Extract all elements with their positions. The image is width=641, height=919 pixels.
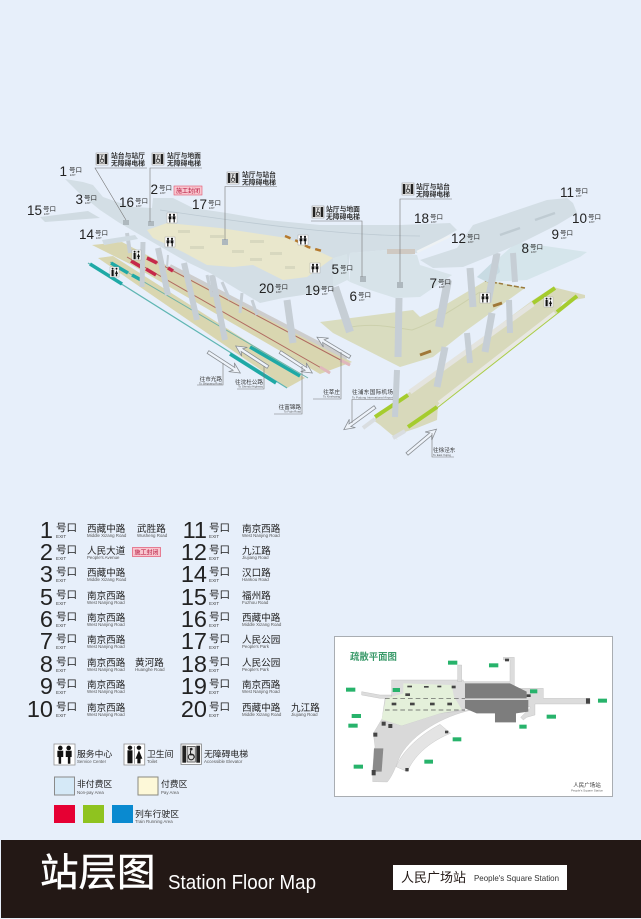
exit list row 19: 南京西路 bbox=[242, 679, 281, 691]
panel: lower concourse bbox=[320, 280, 525, 367]
exit list row 18: EXIT bbox=[209, 668, 219, 673]
exit list row 6: 号口 bbox=[56, 611, 77, 623]
exit list row 11: 号口 bbox=[209, 522, 230, 534]
callout: hall to platform elevator east: 站厅与站台 bbox=[416, 182, 450, 191]
exit list row 3: 3 bbox=[40, 561, 53, 587]
exit labels on map: 号口 bbox=[208, 199, 221, 207]
exit list row 14: 号口 bbox=[209, 566, 230, 578]
exit list row 9: 9 bbox=[40, 673, 53, 699]
exit labels on map: 号口 bbox=[84, 194, 97, 202]
exit list row 7: West Nanjing Road bbox=[87, 644, 125, 649]
exit list row 17 bbox=[181, 628, 280, 654]
exit labels on map: 16 bbox=[119, 195, 134, 210]
exit labels on map: 号口 bbox=[69, 166, 82, 174]
exit list row 2: 号口 bbox=[56, 544, 77, 556]
exit list row 8: EXIT bbox=[56, 668, 66, 673]
direction arrow: to Shendu Highway: To Shendu Highway bbox=[238, 384, 264, 388]
exit list row 3: 号口 bbox=[56, 566, 77, 578]
exit labels on map: 号口 bbox=[467, 233, 480, 241]
exit labels on map: EXIT bbox=[96, 236, 102, 240]
callout: hall to platform elevator west: 无障碍电梯 bbox=[242, 178, 276, 186]
exit labels on map: EXIT bbox=[359, 298, 365, 302]
exit labels on map: 9 bbox=[551, 227, 559, 242]
exit list row 15: 号口 bbox=[209, 589, 230, 601]
exit list row 20: Jiujiang Road bbox=[291, 712, 318, 717]
exit labels on map: EXIT bbox=[531, 250, 537, 254]
green train area bbox=[375, 288, 577, 427]
exit list row 2: 2 bbox=[40, 539, 53, 565]
legend: accessible elevator bbox=[181, 744, 248, 764]
callout: platform to hall elevator bbox=[95, 151, 147, 220]
exit list row 1: Wusheng Road bbox=[137, 533, 168, 538]
support columns bbox=[127, 233, 515, 417]
exit labels on map: 号口 bbox=[438, 278, 451, 286]
exit labels on map: 18 bbox=[414, 211, 429, 226]
exit labels on map: EXIT bbox=[341, 271, 347, 275]
legend: toilet: 卫生间 bbox=[147, 748, 174, 759]
direction arrow: to Shiguang Road: To Shiguang Road bbox=[199, 381, 222, 385]
legend: toilet: Toilet bbox=[147, 759, 158, 764]
direction arrow: to Xinzhuang: 往莘庄 bbox=[323, 388, 340, 396]
exit labels on map: 号口 bbox=[95, 229, 108, 237]
exit list row 6: EXIT bbox=[56, 623, 66, 628]
exit list row 19: 号口 bbox=[209, 678, 230, 690]
legend: accessible elevator: Accessible Elevator bbox=[204, 759, 243, 764]
exit list row 17: 号口 bbox=[209, 633, 230, 645]
exit list row 15 bbox=[181, 584, 271, 610]
exit labels on map: 3 bbox=[75, 192, 83, 207]
exit labels on map: 号口 bbox=[321, 285, 334, 293]
exit list row 1: 1 bbox=[40, 517, 53, 543]
station name in plan: 人民广场站 bbox=[573, 781, 601, 789]
exit list row 5 bbox=[40, 584, 126, 610]
exit list row 17: EXIT bbox=[209, 645, 219, 650]
exit list row 1: 武胜路 bbox=[137, 523, 166, 535]
exit list row 10: 号口 bbox=[56, 701, 77, 713]
exit list row 14: EXIT bbox=[209, 578, 219, 583]
direction arrow: to Fujin Road: 往富锦路 bbox=[279, 403, 301, 411]
legend: train running area: 列车行驶区 bbox=[135, 808, 179, 819]
exit list row 3 bbox=[40, 561, 127, 587]
exit list row 20: 号口 bbox=[209, 701, 230, 713]
exit list row 17: 人民公园 bbox=[242, 635, 280, 646]
exit list row 17: People's Park bbox=[242, 644, 270, 649]
callout: hall to ground elevator bbox=[150, 151, 202, 222]
exit list row 8: 黄河路 bbox=[135, 657, 164, 669]
exit labels on map: 17 bbox=[192, 197, 207, 212]
exit labels on map: EXIT bbox=[209, 206, 215, 210]
legend: toilet bbox=[124, 744, 174, 765]
footer band bbox=[1, 840, 641, 918]
station name plate bbox=[393, 865, 567, 890]
exit list row 2: 施工封闭 bbox=[134, 548, 159, 556]
direction arrow: to Pudong International Airport bbox=[341, 388, 393, 434]
exit labels on map: EXIT bbox=[576, 194, 582, 198]
legend bbox=[54, 744, 248, 824]
exit labels on map: 号口 bbox=[530, 243, 543, 251]
exit list row 16: 西藏中路 bbox=[242, 612, 281, 624]
direction arrow: to Xinzhuang: To Xinzhuang bbox=[323, 394, 340, 398]
exit list row 8: 号口 bbox=[56, 656, 77, 668]
direction arrow: to Pudong International Airport: To Pudong International Airport bbox=[352, 395, 393, 399]
callout: hall to platform elevator east bbox=[400, 182, 452, 282]
exit labels on map: 14 bbox=[79, 227, 94, 242]
exit list row 11: 南京西路 bbox=[242, 523, 281, 535]
panel: exit 8 upper level bbox=[477, 242, 587, 282]
direction arrow: to Shendu Highway: 往沈杜公路 bbox=[235, 378, 263, 386]
panel: pay area hall bbox=[147, 223, 333, 280]
exit list row 18: People's Park bbox=[242, 667, 270, 672]
exit list row 7: 号口 bbox=[56, 633, 77, 645]
exit list row 16: 号口 bbox=[209, 611, 230, 623]
exit list row 7: 7 bbox=[40, 628, 53, 654]
evacuation floor plan drawing bbox=[346, 657, 607, 782]
exit labels on map: EXIT bbox=[589, 220, 595, 224]
exit labels on map: 7 bbox=[429, 276, 437, 291]
exit list row 19: West Nanjing Road bbox=[242, 689, 280, 694]
exit list row 12 bbox=[181, 539, 271, 565]
legend: service center: 服务中心 bbox=[77, 748, 112, 759]
exit list row 8: 南京西路 bbox=[87, 657, 126, 669]
exit labels on map: 15 bbox=[27, 203, 42, 218]
exit list bbox=[27, 517, 320, 722]
station name plate: People's Square Station bbox=[474, 873, 559, 883]
exit list row 2: People's Avenue bbox=[87, 555, 120, 560]
exit list row 12: Jiujiang Road bbox=[242, 555, 269, 560]
exit list row 10: West Nanjing Road bbox=[87, 712, 125, 717]
3D station cutaway map bbox=[27, 151, 601, 458]
exit list row 18 bbox=[181, 651, 280, 677]
direction arrow: to Shiguang Road: 往市光路 bbox=[200, 375, 222, 383]
exit labels on map: 号口 bbox=[560, 229, 573, 237]
exit labels on map: 8 bbox=[521, 241, 529, 256]
exit list row 16: 16 bbox=[181, 606, 207, 632]
footer title: 站层图 bbox=[40, 852, 156, 895]
exit list row 15: 福州路 bbox=[242, 590, 271, 602]
exit list row 19 bbox=[181, 673, 281, 699]
exit list row 14 bbox=[181, 561, 271, 587]
exit labels on map: 1 bbox=[59, 164, 67, 179]
icons: toilets on map bbox=[110, 250, 553, 307]
exit list row 10 bbox=[27, 696, 126, 722]
exit list row 8: Huanghe Road bbox=[135, 667, 165, 672]
exit labels on map: 2 bbox=[150, 182, 158, 197]
elevator landing markers bbox=[123, 220, 403, 288]
exit list row 2 bbox=[40, 539, 160, 565]
exit list row 1: EXIT bbox=[56, 534, 66, 539]
panel: line 2 platform level bbox=[363, 287, 585, 440]
exit list row 3: EXIT bbox=[56, 578, 66, 583]
legend: train running area bbox=[54, 805, 179, 824]
exit list row 11: 11 bbox=[183, 517, 207, 543]
exit list row 20: 20 bbox=[181, 696, 207, 722]
exit labels on map: EXIT bbox=[136, 204, 142, 208]
exit list row 15: Fuzhou Road bbox=[242, 600, 269, 605]
teal train area bbox=[90, 263, 300, 383]
exit labels on map: EXIT bbox=[468, 240, 474, 244]
exit labels on map: EXIT bbox=[160, 191, 166, 195]
exit list row 2: EXIT bbox=[56, 556, 66, 561]
exit list row 3: Middle Xizang Road bbox=[87, 577, 127, 582]
direction arrow: to Shendu Highway bbox=[233, 342, 271, 389]
exit list row 18: 18 bbox=[181, 651, 207, 677]
exit list row 8: 8 bbox=[40, 651, 53, 677]
legend: pay area: 付费区 bbox=[161, 778, 188, 789]
exit list row 16: EXIT bbox=[209, 623, 219, 628]
icons: service centers on map bbox=[165, 213, 490, 303]
exit labels on map: 10 bbox=[572, 211, 587, 226]
direction arrow: to Xinzhuang bbox=[313, 333, 353, 399]
panel: line 1 and 8 platform level bbox=[88, 242, 352, 388]
direction arrow: to Fujin Road bbox=[274, 348, 315, 414]
legend: service center bbox=[54, 744, 112, 765]
exit list row 8 bbox=[40, 651, 165, 677]
exit list row 5: EXIT bbox=[56, 601, 66, 606]
callout: platform to hall elevator: 站台与站厅 bbox=[111, 151, 145, 160]
legend: pay area bbox=[138, 777, 188, 795]
callout: hall to ground elevator east: 无障碍电梯 bbox=[326, 212, 360, 221]
panel: evacuation plan: People's Square Station bbox=[571, 788, 603, 792]
panel: main station hall centre bbox=[333, 250, 452, 298]
exit list row 9: 南京西路 bbox=[87, 679, 126, 691]
exit list row 2: 人民大道 bbox=[87, 545, 126, 557]
exit list row 19: EXIT bbox=[209, 690, 219, 695]
exit list row 14: 汉口路 bbox=[242, 567, 271, 579]
exit list row 5: 5 bbox=[40, 584, 53, 610]
exit labels on map: EXIT bbox=[85, 201, 91, 205]
exit list row 14: 14 bbox=[181, 561, 207, 587]
exit list row 5: 南京西路 bbox=[87, 590, 126, 602]
exit list row 3: 西藏中路 bbox=[87, 567, 126, 579]
exit labels on map: 号口 bbox=[159, 184, 172, 192]
exit list row 18: 人民公园 bbox=[242, 658, 280, 669]
exit list row 1 bbox=[40, 517, 168, 543]
legend: service center: Service Center bbox=[77, 759, 107, 764]
exit labels on map: 6 bbox=[349, 289, 357, 304]
exit list row 9: EXIT bbox=[56, 690, 66, 695]
callout: hall to platform elevator west bbox=[225, 170, 277, 240]
exit labels on map: EXIT bbox=[439, 285, 445, 289]
exit labels on map: 12 bbox=[451, 231, 466, 246]
legend: non-pay area bbox=[54, 777, 112, 795]
exit labels on map: EXIT bbox=[44, 212, 50, 216]
evacuation plan title: 疏散平面图 bbox=[350, 651, 397, 662]
green exit tags bbox=[346, 661, 607, 769]
exit labels on map: 11 bbox=[560, 185, 574, 200]
callout: hall to platform elevator west: 站厅与站台 bbox=[242, 170, 276, 179]
callout: hall to ground elevator east bbox=[311, 204, 362, 277]
exit list row 12: 号口 bbox=[209, 544, 230, 556]
exit labels on map: EXIT bbox=[322, 292, 328, 296]
exit labels on map: 号口 bbox=[358, 291, 371, 299]
exit list row 5: 号口 bbox=[56, 589, 77, 601]
exit list row 11: West Nanjing Road bbox=[242, 533, 280, 538]
callout: hall to platform elevator east: 无障碍电梯 bbox=[416, 190, 450, 198]
exit labels on map: 号口 bbox=[588, 213, 601, 221]
callout: hall to ground elevator: 无障碍电梯 bbox=[167, 158, 201, 168]
direction arrow: to East Xujing: To East Xujing bbox=[433, 453, 451, 457]
exit labels on map: EXIT bbox=[561, 236, 567, 240]
exit list row 18: 号口 bbox=[209, 656, 230, 668]
exit list row 1: 西藏中路 bbox=[87, 523, 126, 535]
exit list row 20: EXIT bbox=[209, 713, 219, 718]
exit labels on map: EXIT bbox=[431, 220, 437, 224]
exit list row 15: EXIT bbox=[209, 601, 219, 606]
exit list row 20: 西藏中路 bbox=[242, 702, 281, 714]
exit list row 9 bbox=[40, 673, 126, 699]
footer english title: Station Floor Map bbox=[168, 872, 316, 894]
closure badge on map bbox=[174, 186, 202, 195]
exit list row 9: 号口 bbox=[56, 678, 77, 690]
direction arrow: to Fujin Road: To Fujin Road bbox=[284, 410, 301, 414]
closure badge on map: 施工封闭 bbox=[176, 187, 200, 195]
exit labels on map: 号口 bbox=[43, 205, 56, 213]
exit labels on map bbox=[27, 164, 601, 304]
exit list row 12: 九江路 bbox=[242, 545, 271, 557]
exit list row 1: 号口 bbox=[56, 522, 77, 534]
exit labels on map: 号口 bbox=[340, 264, 353, 272]
exit list row 17: 17 bbox=[181, 628, 207, 654]
panel: evacuation plan bbox=[334, 636, 612, 796]
legend: train running area: Train Running Area bbox=[135, 819, 173, 824]
exit list row 8: West Nanjing Road bbox=[87, 667, 125, 672]
exit list row 1: Middle Xizang Road bbox=[87, 533, 127, 538]
exit list row 20 bbox=[181, 696, 320, 722]
exit labels on map: 19 bbox=[305, 283, 320, 298]
panel: main station hall east bbox=[387, 198, 577, 268]
exit list row 7: EXIT bbox=[56, 645, 66, 650]
exit list row 9: West Nanjing Road bbox=[87, 689, 125, 694]
exit labels on map: EXIT bbox=[70, 173, 76, 177]
exit list row 11: EXIT bbox=[209, 534, 219, 539]
exit list row 7: 南京西路 bbox=[87, 634, 126, 646]
exit list row 6 bbox=[40, 606, 126, 632]
exit list row 6: 6 bbox=[40, 606, 53, 632]
exit list row 12: EXIT bbox=[209, 556, 219, 561]
exit labels on map: EXIT bbox=[276, 290, 282, 294]
station name plate: 人民广场站 bbox=[401, 870, 466, 885]
exit list row 20: 九江路 bbox=[291, 702, 320, 714]
red train area bbox=[131, 258, 173, 275]
exit labels on map: 5 bbox=[331, 262, 339, 277]
exit list row 10: 南京西路 bbox=[87, 702, 126, 714]
direction arrow: to Pudong International Airport: 往浦东国际机场 bbox=[352, 388, 393, 396]
exit list row 10: EXIT bbox=[56, 713, 66, 718]
callout: hall to ground elevator: 站厅与地面 bbox=[167, 151, 201, 160]
exit list row 6: West Nanjing Road bbox=[87, 622, 125, 627]
exit labels on map: 号口 bbox=[135, 197, 148, 205]
exit list row 10: 10 bbox=[27, 696, 53, 722]
exit list row 5: West Nanjing Road bbox=[87, 600, 125, 605]
exit list row 12: 12 bbox=[181, 539, 207, 565]
direction arrow: to Shiguang Road bbox=[197, 348, 243, 385]
exit labels on map: 号口 bbox=[275, 283, 288, 291]
exit list row 16: Middle Xizang Road bbox=[242, 622, 282, 627]
panel: main station hall west bbox=[40, 179, 457, 303]
direction arrow: to East Xujing: 往徐泾东 bbox=[433, 446, 456, 454]
exit list row 7 bbox=[40, 628, 126, 654]
exit list row 14: Hankou Road bbox=[242, 577, 269, 582]
exit list row 16 bbox=[181, 606, 282, 632]
exit list row 6: 南京西路 bbox=[87, 612, 126, 624]
exit list row 11 bbox=[183, 517, 281, 543]
callout: platform to hall elevator: 无障碍电梯 bbox=[111, 158, 145, 168]
legend: non-pay area: Non-pay Area bbox=[77, 790, 104, 795]
callout: hall to ground elevator east: 站厅与地面 bbox=[326, 204, 360, 214]
exit labels on map: 20 bbox=[259, 281, 274, 296]
legend: accessible elevator: 无障碍电梯 bbox=[204, 748, 248, 759]
exit list row 19: 19 bbox=[181, 673, 207, 699]
exit list row 15: 15 bbox=[181, 584, 207, 610]
exit labels on map: 号口 bbox=[575, 187, 588, 195]
exit list row 20: Middle Xizang Road bbox=[242, 712, 282, 717]
legend: pay area: Pay Area bbox=[161, 790, 179, 795]
legend: non-pay area: 非付费区 bbox=[77, 778, 112, 789]
direction arrow: to East Xujing bbox=[404, 425, 456, 458]
exit labels on map: 号口 bbox=[430, 213, 443, 221]
